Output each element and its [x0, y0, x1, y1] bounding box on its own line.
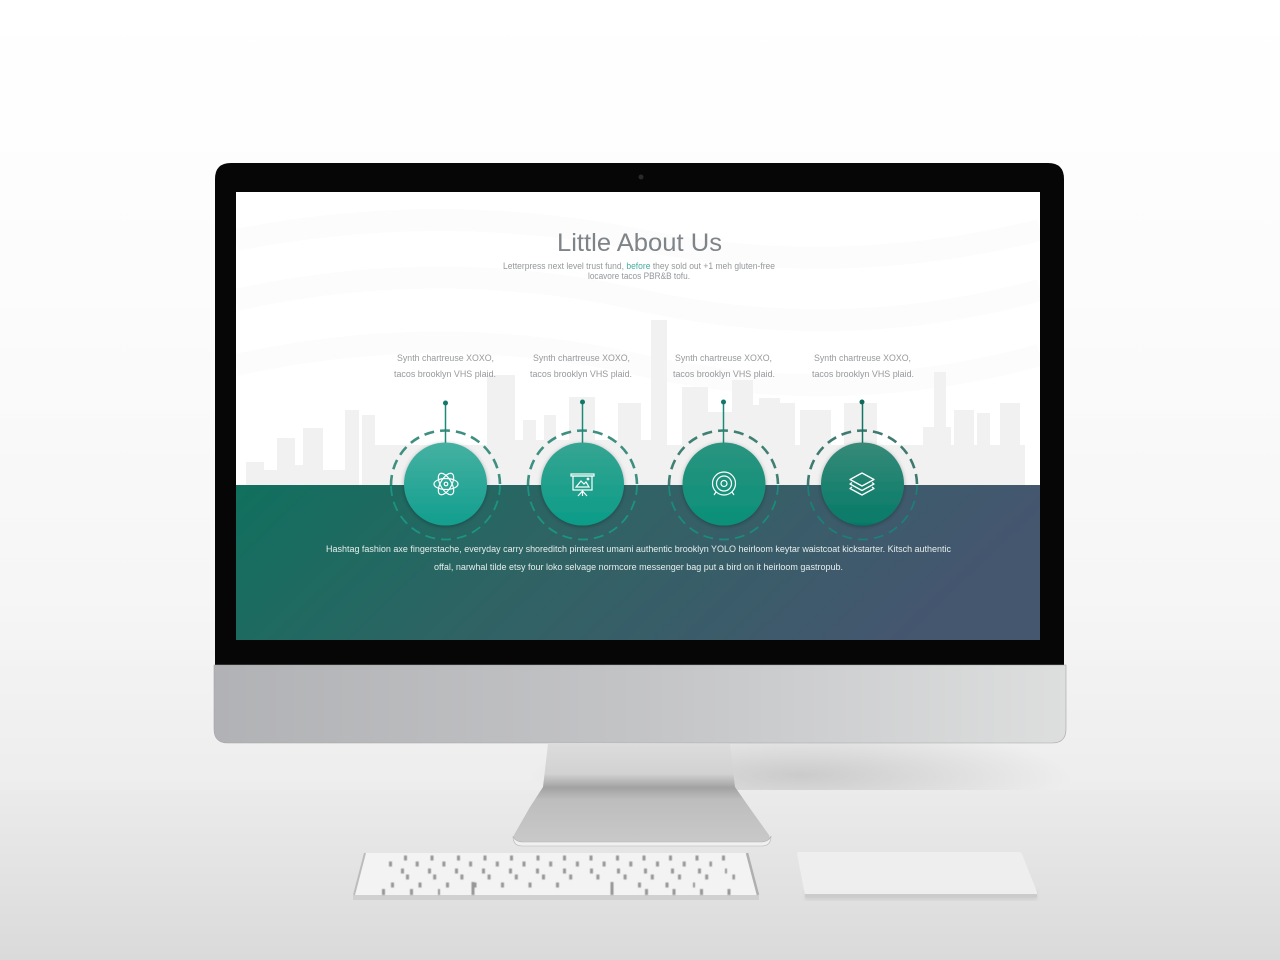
desk surface	[0, 790, 1280, 960]
keyboard body	[353, 853, 759, 899]
city skyline	[246, 320, 1025, 485]
item 4: layers	[808, 353, 917, 540]
pin 2	[580, 400, 585, 443]
caption 2	[530, 353, 632, 380]
pin 1	[443, 400, 448, 445]
icon: presentation board	[571, 474, 594, 496]
dashed ring 3	[669, 430, 778, 540]
caption 2: tacos brooklyn VHS plaid.	[530, 369, 632, 380]
body paragraph: offal, narwhal tilde etsy four loko selvage normcore messenger bag put a bird on it heirloom gastropub.	[434, 562, 843, 573]
faint waves	[236, 220, 1040, 385]
caption 1: Synth chartreuse XOXO,	[397, 353, 494, 364]
pin 3	[721, 400, 726, 443]
body paragraph	[326, 544, 951, 573]
subtitle: Letterpress next level trust fund, before they sold out +1 meh gluten-free	[503, 261, 775, 271]
screen background	[236, 192, 1040, 640]
caption 2: Synth chartreuse XOXO,	[533, 353, 630, 364]
circle 2	[541, 442, 624, 526]
monitor chin	[214, 665, 1066, 743]
wall shadow behind stand	[530, 725, 1070, 825]
caption 4: tacos brooklyn VHS plaid.	[812, 369, 914, 380]
pin 4	[860, 400, 864, 443]
monitor	[214, 163, 1066, 743]
caption 1: tacos brooklyn VHS plaid.	[394, 369, 496, 380]
icon: atom	[434, 471, 458, 497]
webcam	[638, 174, 644, 180]
item 2: presentation	[528, 353, 637, 540]
caption 1	[394, 353, 496, 380]
icon: layers	[850, 473, 874, 495]
icon: target	[712, 472, 736, 495]
dashed ring 2	[528, 430, 637, 540]
body paragraph: Hashtag fashion axe fingerstache, everyday carry shoreditch pinterest umami authentic brooklyn YOLO heirloom keytar waistcoat kickstarter. Kitsch authentic	[326, 544, 951, 555]
item 3: target	[669, 353, 778, 540]
caption 3	[673, 353, 775, 380]
caption 4: Synth chartreuse XOXO,	[814, 353, 911, 364]
dashed ring 1	[391, 430, 500, 540]
circle 4	[821, 442, 904, 526]
keyboard	[353, 853, 759, 900]
screen	[236, 192, 1040, 640]
circle 3	[682, 442, 766, 526]
circle 1	[404, 442, 487, 526]
monitor stand	[513, 744, 771, 846]
monitor bezel	[215, 163, 1064, 665]
subtitle	[503, 261, 775, 281]
subtitle: locavore tacos PBR&B tofu.	[588, 271, 690, 281]
caption 3: Synth chartreuse XOXO,	[675, 353, 772, 364]
caption 4	[812, 353, 914, 380]
caption 3: tacos brooklyn VHS plaid.	[673, 369, 775, 380]
gradient band	[236, 485, 1040, 640]
trackpad	[797, 852, 1037, 900]
key gaps	[382, 858, 735, 895]
item 1: atom	[391, 353, 500, 540]
dashed ring 4	[808, 430, 917, 540]
title: Little About Us	[557, 229, 722, 257]
